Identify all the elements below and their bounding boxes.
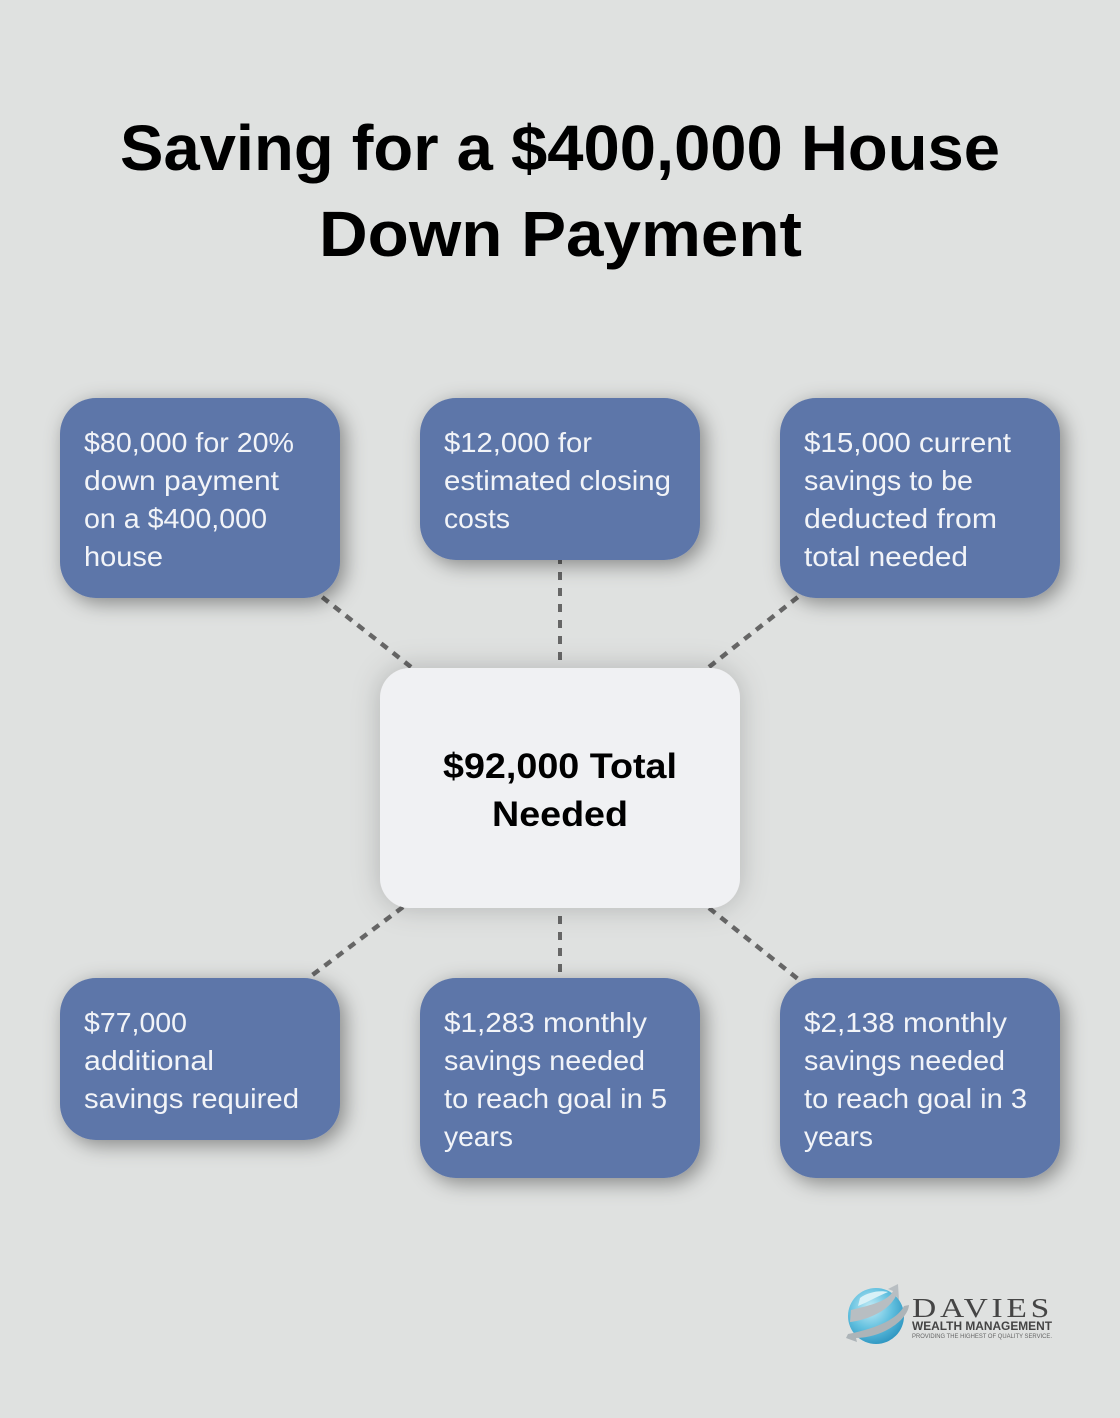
panel: three year savings: savings needed (804, 1045, 1005, 1076)
connector: bottom right (709, 908, 803, 983)
panel: current savings: savings to be (804, 465, 973, 496)
panel: closing costs: $12,000 for (444, 427, 592, 458)
panel: five year savings: years (444, 1121, 513, 1152)
connector: top left (317, 593, 411, 667)
panel: additional savings: $77,000 (84, 1007, 187, 1038)
connector: top right (709, 593, 803, 667)
panel: current savings: deducted from (804, 503, 997, 534)
panel: additional savings: savings required (84, 1083, 299, 1114)
title (120, 112, 1000, 270)
panel: closing costs: costs (444, 503, 510, 534)
logo: Davies Wealth Management (846, 1284, 1053, 1344)
panel: 20% down payment: on a $400,000 (84, 503, 267, 534)
panel: current savings: total needed (804, 541, 968, 572)
panel: central total: $92,000 Total (443, 747, 677, 786)
logo: Davies Wealth Management: WEALTH MANAGEMENT (912, 1321, 1052, 1333)
panel: 20% down payment (60, 398, 340, 598)
title: Down Payment (319, 198, 802, 270)
connector: bottom middle (558, 916, 562, 972)
panel: 20% down payment: house (84, 541, 163, 572)
panel: current savings (780, 398, 1060, 598)
panel: three year savings: years (804, 1121, 873, 1152)
title: Saving for a $400,000 House (120, 112, 1000, 184)
panel: three year savings (780, 978, 1060, 1178)
panel: central total: Needed (492, 795, 628, 834)
connector: top middle (558, 560, 562, 660)
panel: central total (380, 668, 740, 908)
panel: additional savings: additional (84, 1045, 214, 1076)
panel: five year savings: to reach goal in 5 (444, 1083, 667, 1114)
logo: Davies Wealth Management: DAVIES (912, 1293, 1053, 1323)
panel: closing costs: estimated closing (444, 465, 671, 496)
panel: five year savings: savings needed (444, 1045, 645, 1076)
panel: five year savings: $1,283 monthly (444, 1007, 647, 1038)
panel: 20% down payment: $80,000 for 20% (84, 427, 294, 458)
panel: three year savings: to reach goal in 3 (804, 1083, 1027, 1114)
connector: bottom left (311, 907, 403, 976)
panel: five year savings (420, 978, 700, 1178)
panel: current savings: $15,000 current (804, 427, 1011, 458)
logo: Davies Wealth Management: PROVIDING THE HIGHEST OF QUALITY SERVICE. (912, 1333, 1052, 1340)
panel: additional savings (60, 978, 340, 1140)
icon: globe with arrows (846, 1284, 909, 1344)
panel: 20% down payment: down payment (84, 465, 279, 496)
panel: three year savings: $2,138 monthly (804, 1007, 1007, 1038)
panel: closing costs (420, 398, 700, 560)
